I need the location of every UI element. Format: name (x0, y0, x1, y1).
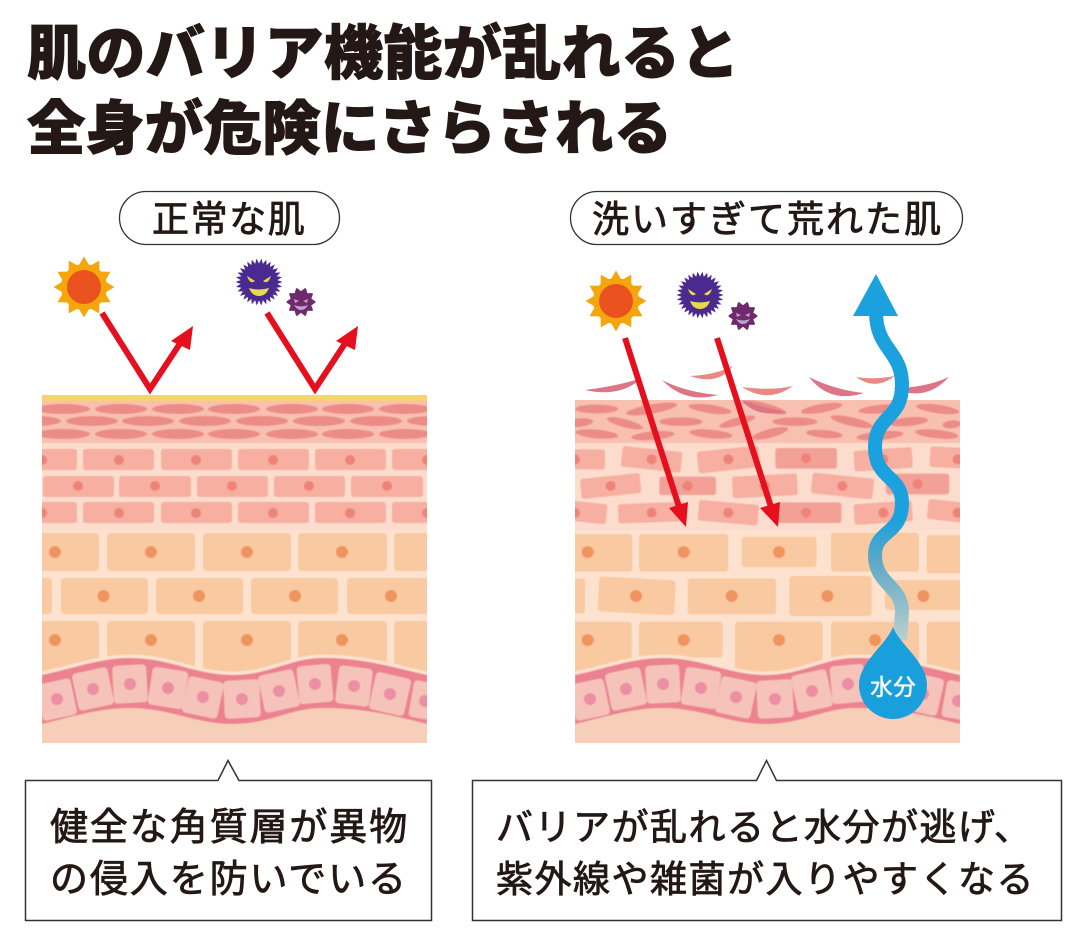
callout: normal skin: 健全な角質層が異物 (50, 807, 409, 849)
label: over-washed rough skin: 洗いすぎて荒れた肌 (592, 199, 943, 240)
panel: damaged skin cross-section (575, 400, 960, 743)
title: 肌のバリア機能が乱れると (27, 21, 740, 87)
peeling flakes (585, 366, 949, 414)
icon: small germ (left) (288, 288, 314, 316)
arrow: UV penetrating (625, 338, 688, 527)
orange cell rows (30, 533, 444, 681)
arrow: germs penetrating (717, 338, 780, 527)
callout: normal skin: の侵入を防いでいる (50, 859, 408, 901)
icon: large germ (right) (676, 271, 724, 319)
icon: large germ (left) (236, 258, 282, 306)
icon: small germ (right) (730, 302, 756, 330)
callout: damaged skin: バリアが乱れると水分が逃げ、 (496, 807, 1032, 848)
yellow barrier layer (42, 395, 427, 402)
callout: normal skin (26, 760, 432, 920)
stratum corneum (42, 404, 427, 440)
arrow: UV reflected (102, 313, 193, 389)
title: 全身が危険にさらされる (27, 97, 673, 162)
icon: sun (right) (586, 270, 646, 332)
damaged corneum and cells (563, 397, 971, 526)
orange cells (562, 533, 973, 678)
arrow: germs reflected (267, 313, 358, 389)
icon: water drop (859, 627, 927, 719)
label: normal skin: 正常な肌 (152, 199, 306, 240)
displaced pink cells (564, 445, 971, 526)
icon: water drop: 水分 (870, 674, 916, 700)
callout: damaged skin (472, 760, 1062, 920)
pink cell rows (36, 449, 442, 523)
panel: normal skin cross-section (42, 395, 427, 743)
icon: sun (left) (54, 256, 114, 318)
callout: damaged skin: 紫外線や雑菌が入りやすくなる (496, 859, 1035, 900)
label: over-washed rough skin (570, 192, 962, 244)
label: normal skin (120, 192, 340, 244)
title (27, 21, 740, 162)
arrow: water escaping (853, 274, 902, 640)
